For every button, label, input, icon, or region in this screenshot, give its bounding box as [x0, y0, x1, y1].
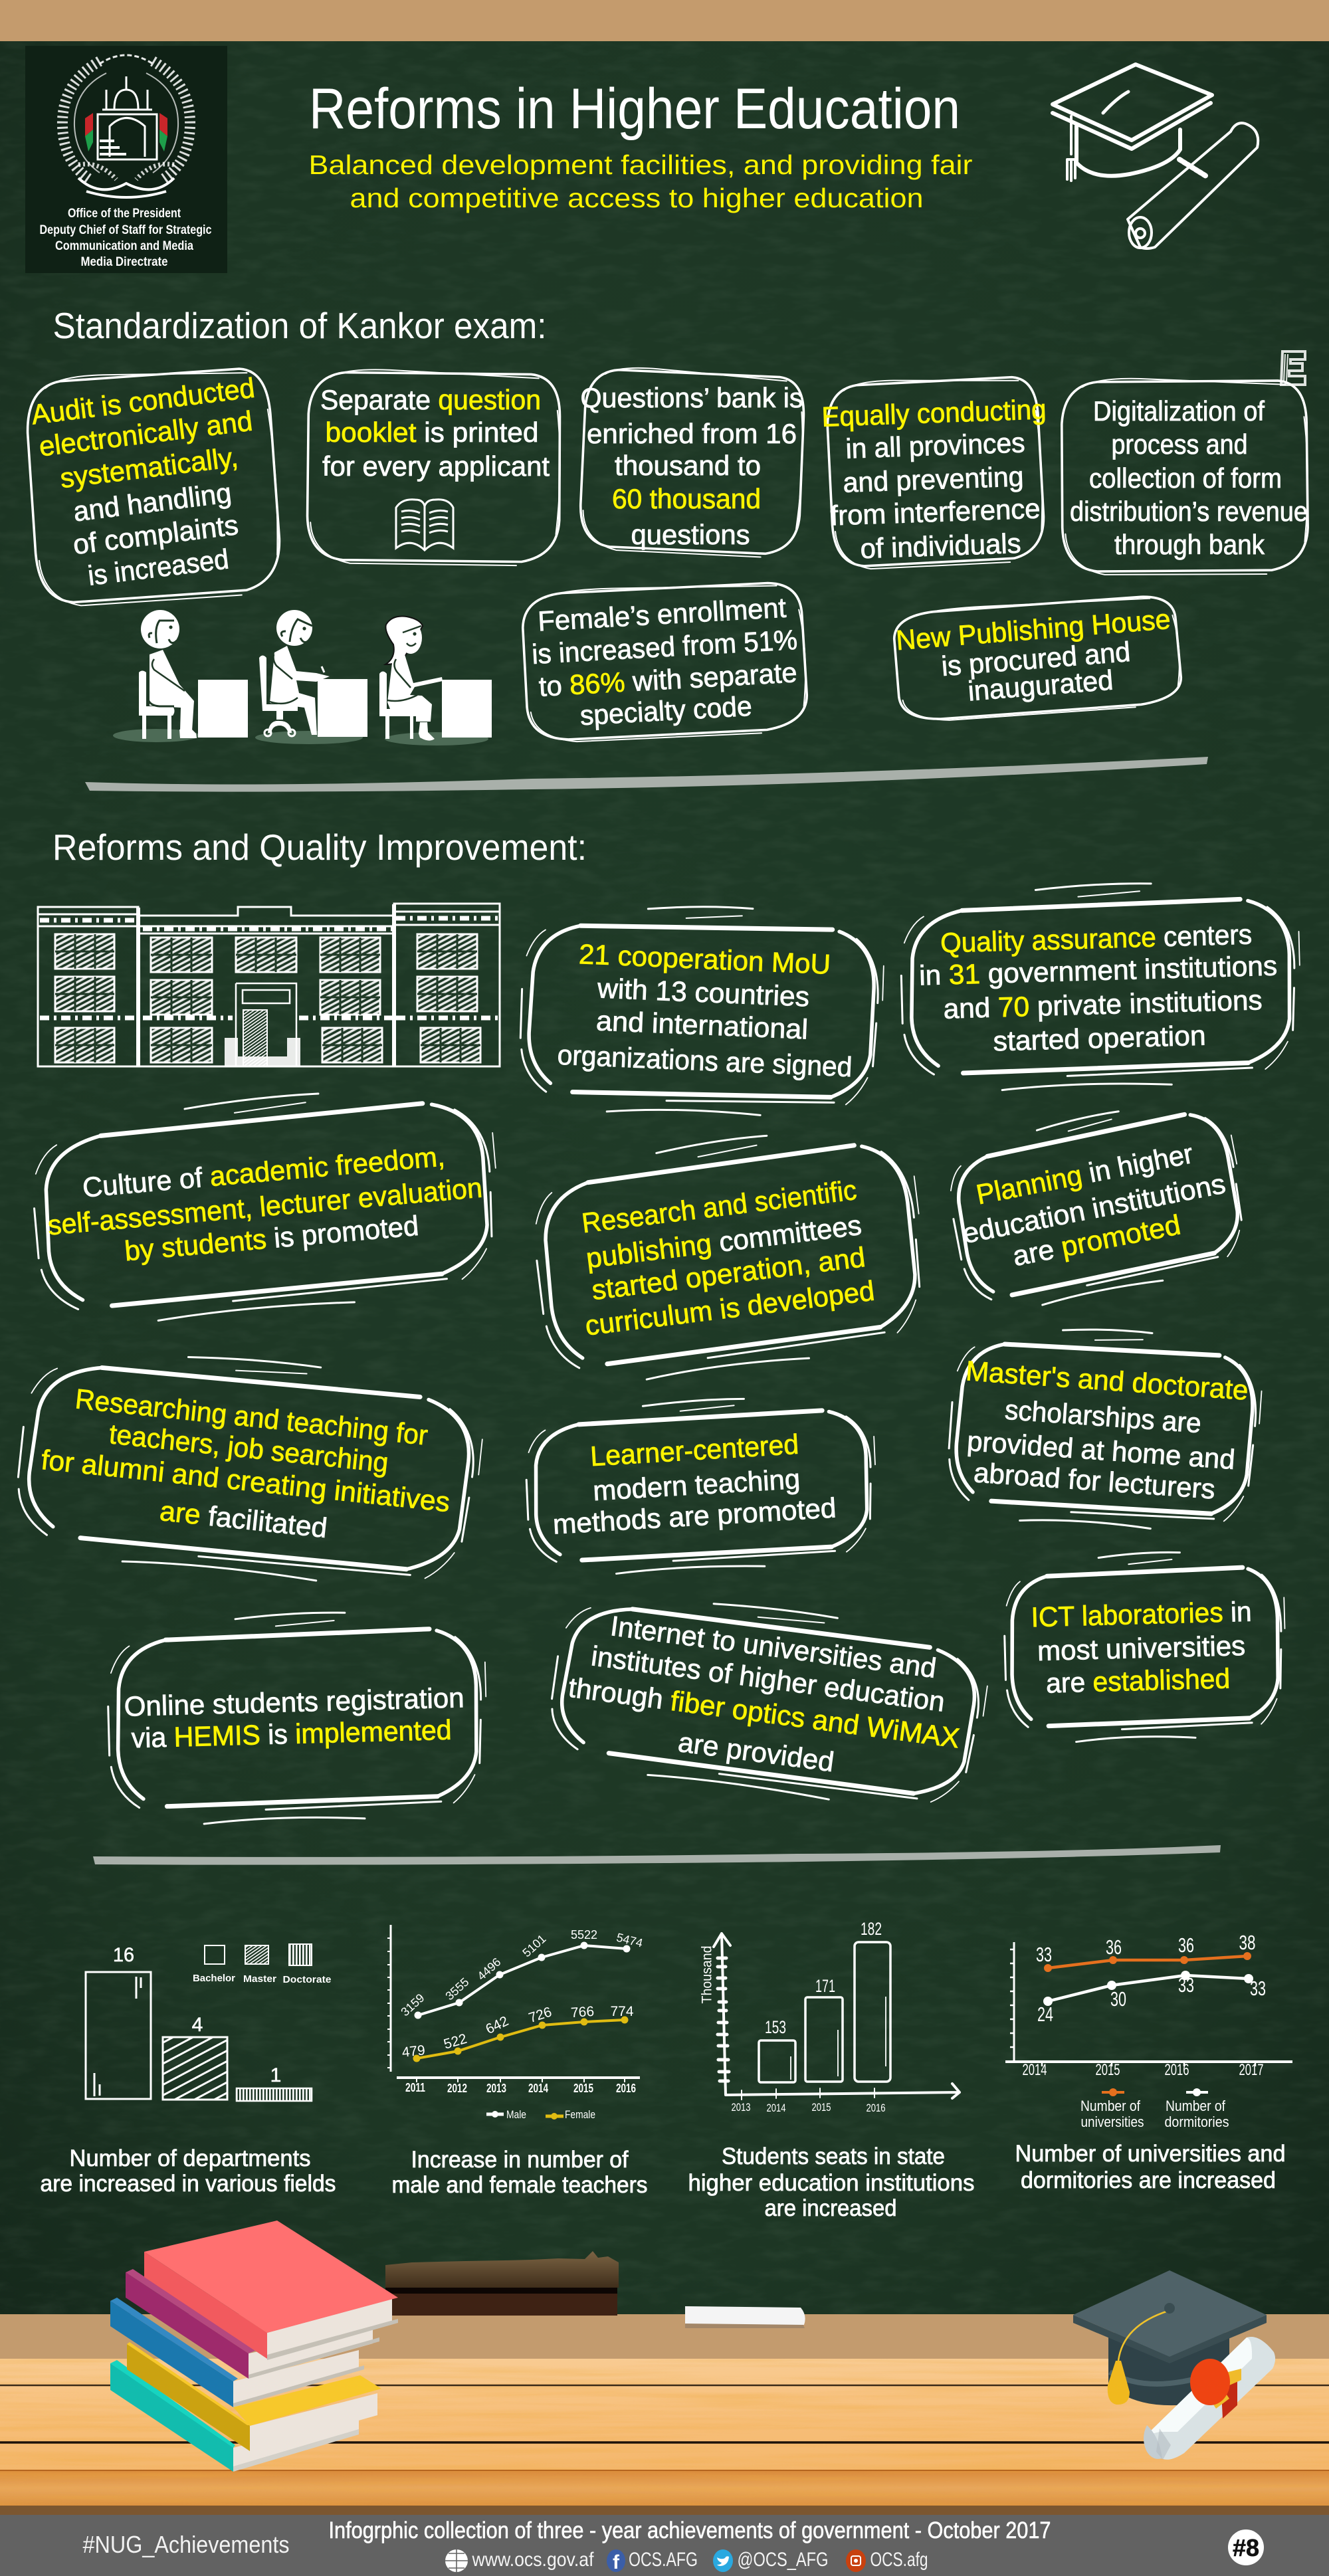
- scholarships text: [965, 1355, 1249, 1505]
- equal conduct text: from interference: [830, 493, 1041, 532]
- legend labels: Master: [243, 1973, 276, 1985]
- value labels: 33: [1178, 1973, 1194, 1997]
- axis title: Thousand: [699, 1945, 715, 2004]
- value labels: 36: [1178, 1933, 1194, 1957]
- panel: scholarships box: [944, 1319, 1265, 1537]
- instagram text: OCS.afg: [870, 2549, 928, 2571]
- blue book: [110, 2298, 364, 2407]
- question bank text: [581, 382, 803, 550]
- equal conduct text: in all provinces: [845, 427, 1025, 464]
- female values: 479: [401, 2042, 426, 2060]
- cap board: [1073, 2315, 1267, 2363]
- caption: Increase in number of: [411, 2147, 629, 2173]
- chart: departments bars: [40, 1944, 336, 2197]
- subtitle: [308, 149, 973, 213]
- x axis years: 2012: [447, 2082, 467, 2095]
- HEMIS text: Online students registration: [124, 1682, 464, 1722]
- digitalization text: process and: [1111, 429, 1248, 460]
- scholarships text: abroad for lecturers: [973, 1456, 1216, 1505]
- audit text: Audit is conducted: [30, 372, 256, 431]
- icon: open book: [396, 500, 453, 550]
- panel: learner-centered box: [523, 1393, 879, 1577]
- panel: MoU box: [518, 901, 885, 1120]
- researching text: for alumni and creating initiatives: [40, 1444, 451, 1518]
- bars: [759, 1942, 890, 2082]
- chalk ledge: [0, 2314, 1329, 2359]
- legend: dormitories: [1164, 2114, 1229, 2130]
- chalk stick: [685, 2306, 805, 2328]
- universities series: [1044, 1952, 1251, 1972]
- academic freedom text: by students is promoted: [124, 1210, 420, 1266]
- panel: HEMIS registration box: [106, 1609, 489, 1827]
- floor shadows: [113, 729, 488, 745]
- axes: [1005, 1942, 1292, 2066]
- axes: [387, 1925, 640, 2082]
- x axis years: 2015: [573, 2082, 593, 2095]
- male values: 4496: [474, 1955, 504, 1983]
- learner text: modern teaching: [592, 1463, 801, 1506]
- bar values: 16: [113, 1944, 134, 1966]
- panel: female enrollment box: [521, 580, 809, 743]
- eraser: [385, 2251, 619, 2316]
- quality assurance text: in 31 government institutions: [919, 949, 1278, 991]
- caption: [392, 2147, 647, 2198]
- booklet text: Separate question: [320, 384, 541, 415]
- illustration: stack of books: [110, 2221, 398, 2472]
- planning text: education institutions: [960, 1167, 1228, 1249]
- x axis years: [1022, 2061, 1264, 2079]
- teal book: [110, 2360, 359, 2472]
- bar: doctorate 1: [237, 2088, 312, 2101]
- panel: internet box: [544, 1580, 994, 1820]
- booklet text: booklet is printed: [326, 417, 538, 448]
- footer title: Infogrphic collection of three - year achievements of government - October 2017: [328, 2518, 1051, 2543]
- male values: [398, 1928, 644, 2019]
- student 2: [259, 610, 330, 736]
- panel: equal conduct box: [821, 374, 1047, 571]
- x axis years: 2016: [1164, 2061, 1189, 2079]
- panel: publishing house box: [892, 593, 1183, 724]
- subtitle: and competitive access to higher education: [350, 183, 924, 213]
- quality assurance text: [919, 918, 1278, 1056]
- scholarships text: provided at home and: [966, 1425, 1236, 1475]
- caption: Number of universities and: [1015, 2141, 1285, 2167]
- caption: Number of departments: [69, 2145, 311, 2171]
- panel: digitalization box: [1062, 379, 1308, 575]
- MoU text: 21 cooperation MoU: [578, 938, 831, 980]
- planning text: Planning in higher: [973, 1138, 1195, 1210]
- tassel: [1108, 2303, 1175, 2405]
- legend: Number of: [1166, 2098, 1226, 2114]
- booklet text: for every applicant: [322, 450, 550, 482]
- question bank text: questions: [631, 519, 750, 550]
- female values: 522: [442, 2031, 468, 2052]
- value labels: 33: [1250, 1977, 1266, 2000]
- desk 3: [442, 680, 492, 738]
- MoU text: and international: [595, 1005, 809, 1045]
- female values: 766: [570, 2004, 595, 2021]
- caption: [40, 2145, 336, 2197]
- ICT text: most universities: [1037, 1630, 1246, 1666]
- desk 2: [318, 679, 367, 737]
- twitter text: @OCS_AFG: [738, 2549, 828, 2571]
- male series: [415, 1941, 630, 2019]
- caption: [688, 2143, 974, 2221]
- researching text: Researching and teaching for: [74, 1383, 429, 1451]
- publishing house text: [895, 603, 1172, 707]
- x axis years: [405, 2081, 636, 2095]
- illustration: students at desks: [113, 610, 492, 745]
- HEMIS text: via HEMIS is implemented: [131, 1714, 452, 1753]
- value labels: 38: [1239, 1931, 1256, 1954]
- female enrollment text: [531, 592, 798, 731]
- MoU text: organizations are signed: [557, 1039, 853, 1082]
- panel: research committees box: [525, 1118, 935, 1391]
- male values: 3555: [443, 1975, 472, 2003]
- academic freedom text: [47, 1140, 484, 1266]
- digitalization text: through bank: [1114, 529, 1265, 560]
- axes with arrows: [714, 1933, 960, 2100]
- panel: question booklet box: [306, 369, 562, 567]
- x axis years: 2014: [767, 2102, 785, 2114]
- subtitle: Balanced development facilities, and providing fair: [308, 149, 973, 180]
- panel: researching and teaching box: [11, 1337, 488, 1597]
- value labels: 36: [1106, 1935, 1122, 1959]
- digitalization text: [1070, 395, 1308, 560]
- MoU text: [557, 938, 853, 1082]
- researching text: are facilitated: [158, 1495, 329, 1543]
- coral book: [144, 2221, 398, 2360]
- panel: ICT laboratories box: [1003, 1549, 1288, 1743]
- audit text: and handling: [72, 477, 233, 527]
- icon: instagram: [846, 2549, 866, 2572]
- male values: 5101: [520, 1932, 549, 1959]
- x axis years: 2016: [867, 2102, 885, 2114]
- research committees text: curriculum is developed: [583, 1275, 876, 1341]
- panel: planning box: [939, 1090, 1256, 1318]
- x axis years: 2014: [1022, 2061, 1047, 2079]
- female values: 774: [610, 2004, 634, 2019]
- page number badge: #8: [1233, 2534, 1259, 2561]
- digitalization text: distribution’s revenue: [1070, 496, 1308, 527]
- icon: twitter: [713, 2549, 733, 2572]
- equal conduct text: [821, 393, 1047, 564]
- male values: 5522: [571, 1928, 597, 1941]
- panel: academic freedom box: [27, 1078, 506, 1330]
- heading: Standardization of Kankor exam: Standardization of Kankor exam:: [53, 305, 546, 346]
- scholarships text: Master's and doctorate: [965, 1355, 1249, 1406]
- panel: question bank box: [577, 365, 807, 559]
- legend: universities: [1080, 2114, 1144, 2130]
- bar: bachelor 16: [86, 1972, 151, 2099]
- ICT text: are established: [1046, 1662, 1231, 1699]
- heading: Reforms and Quality Improvement: Reforms and Quality Improvement:: [52, 827, 587, 868]
- publishing house text: inaugurated: [967, 664, 1114, 707]
- organisation text: [40, 207, 212, 269]
- chart: universities and dormitories line chart: [1005, 1931, 1292, 2193]
- researching text: [40, 1383, 451, 1543]
- learner text: Learner-centered: [589, 1429, 799, 1472]
- legend: Female: [565, 2108, 595, 2121]
- x axis years: 2016: [616, 2082, 636, 2095]
- equal conduct text: and preventing: [843, 460, 1024, 498]
- panel: quality assurance box: [899, 879, 1302, 1092]
- question bank text: thousand to: [615, 450, 761, 481]
- page number badge: [1228, 2529, 1264, 2565]
- illustration: school building: [38, 904, 500, 1066]
- yellow book: [127, 2342, 381, 2451]
- bar: master 4: [163, 2037, 227, 2100]
- planning text: [960, 1138, 1228, 1272]
- legend: Male: [506, 2108, 526, 2121]
- digitalization text: Digitalization of: [1093, 395, 1265, 427]
- hashtag: #NUG_Achievements: [82, 2531, 290, 2558]
- internet text: institutes of higher education: [589, 1640, 947, 1718]
- audit text: of complaints: [71, 509, 240, 560]
- website text: www.ocs.gov.af: [472, 2549, 594, 2571]
- research committees text: started operation, and: [590, 1241, 867, 1306]
- illustration: graduation cap and diploma: [1073, 2270, 1275, 2460]
- female values: 726: [527, 2004, 554, 2026]
- bar values: 1: [270, 2064, 281, 2086]
- male values: 5474: [615, 1931, 644, 1950]
- x axis years: 2013: [486, 2082, 506, 2095]
- building windows: [55, 934, 480, 1062]
- research committees text: Research and scientific: [580, 1174, 859, 1238]
- legend icons: [205, 1944, 312, 1965]
- equal conduct text: Equally conducting: [821, 393, 1047, 433]
- value labels: 30: [1110, 1987, 1126, 2011]
- audit text: is increased: [86, 543, 231, 591]
- female values: [401, 2004, 634, 2060]
- x axis years: 2014: [528, 2082, 548, 2095]
- MoU text: with 13 countries: [596, 972, 810, 1013]
- female enrollment text: Female’s enrollment: [537, 592, 787, 637]
- caption: are increased: [764, 2195, 897, 2221]
- organisation text: Office of the President: [68, 207, 181, 221]
- audit text: electronically and: [37, 405, 254, 462]
- panel: audit box: [25, 365, 282, 608]
- legend: Number of: [1080, 2098, 1141, 2114]
- x axis years: 2013: [731, 2101, 751, 2114]
- female enrollment text: to 86% with separate: [538, 656, 798, 702]
- audit text: systematically,: [58, 441, 240, 494]
- legend: [1080, 2088, 1229, 2130]
- legend labels: [193, 1973, 331, 1985]
- wall band at top: [0, 0, 1329, 41]
- title: Reforms in Higher Education: [309, 77, 960, 141]
- internet text: are provided: [676, 1726, 836, 1777]
- bar values: 153: [765, 2017, 786, 2037]
- icon: national emblem: [62, 55, 190, 197]
- caption: [1015, 2141, 1285, 2193]
- icon: facebook: f: [613, 2551, 620, 2573]
- facebook text: OCS.AFG: [629, 2549, 698, 2571]
- x axis years: [731, 2101, 885, 2114]
- desk 1: [198, 680, 248, 738]
- bar values: 182: [861, 1919, 882, 1939]
- equal conduct text: of individuals: [860, 528, 1021, 564]
- cap skull: [1108, 2333, 1229, 2405]
- diploma: [1144, 2337, 1275, 2460]
- icon: chalk letter E: [1281, 351, 1305, 385]
- female enrollment text: specialty code: [579, 690, 753, 731]
- caption: male and female teachers: [392, 2172, 647, 2198]
- bar values: 4: [192, 2014, 203, 2036]
- scholarships text: scholarships are: [1004, 1394, 1202, 1438]
- caption: Students seats in state: [722, 2143, 945, 2169]
- bar values: [765, 1919, 882, 2037]
- publishing house text: is procured and: [940, 636, 1132, 682]
- internet text: Internet to universities and: [609, 1610, 938, 1684]
- publishing house text: New Publishing House: [895, 603, 1172, 656]
- legend: [486, 2108, 595, 2121]
- x axis years: 2017: [1239, 2061, 1264, 2079]
- student 1: [139, 610, 197, 739]
- question bank text: 60 thousand: [612, 483, 761, 514]
- academic freedom text: Culture of academic freedom,: [81, 1140, 446, 1203]
- caption: higher education institutions: [688, 2170, 974, 2196]
- value labels: 33: [1036, 1943, 1052, 1966]
- legend labels: Bachelor: [193, 1973, 235, 1984]
- female series: [413, 2016, 629, 2062]
- student 3: [379, 617, 443, 741]
- icon: website: [445, 2549, 468, 2572]
- chart: teachers line chart: [387, 1925, 647, 2198]
- value labels: [1036, 1931, 1266, 2026]
- x axis years: 2015: [812, 2101, 831, 2114]
- legend labels: Doctorate: [283, 1974, 331, 1985]
- male values: 3159: [398, 1991, 427, 2019]
- female enrollment text: is increased from 51%: [531, 624, 798, 670]
- purple book: [126, 2269, 379, 2379]
- audit text: [30, 372, 256, 591]
- bar values: 171: [815, 1976, 835, 1996]
- organisation text: Communication and Media: [55, 239, 193, 253]
- icon: facebook: [607, 2549, 625, 2573]
- digitalization text: collection of form: [1089, 462, 1282, 494]
- footer bar: [0, 2515, 1329, 2576]
- organisation text: Media Directrate: [81, 255, 167, 269]
- internet text: [567, 1610, 962, 1777]
- planning text: are promoted: [1010, 1209, 1183, 1272]
- organisation text: Deputy Chief of Staff for Strategic: [40, 223, 212, 237]
- wooden table: [0, 2359, 1329, 2515]
- academic freedom text: self-assessment, lecturer evaluation: [47, 1172, 484, 1241]
- quality assurance text: started operation: [993, 1020, 1206, 1056]
- question bank text: Questions’ bank is: [581, 382, 803, 413]
- caption: are increased in various fields: [40, 2171, 336, 2197]
- internet text: through fiber optics and WiMAX: [567, 1672, 962, 1754]
- ICT text: [1031, 1596, 1252, 1699]
- bar values: [113, 1944, 281, 2086]
- researching text: teachers, job searching: [108, 1418, 390, 1478]
- x axis years: 2011: [405, 2081, 425, 2094]
- booklet text: [320, 384, 550, 482]
- female values: 642: [483, 2013, 511, 2037]
- icon: graduation cap and scroll line art: [1053, 64, 1258, 248]
- quality assurance text: Quality assurance centers: [940, 918, 1253, 959]
- question bank text: enriched from 16: [587, 418, 797, 449]
- x axis years: 2015: [1095, 2061, 1120, 2079]
- panel: logo block: [25, 46, 227, 273]
- learner text: [552, 1429, 837, 1540]
- dormitories series: [1043, 1971, 1253, 2006]
- research committees text: [580, 1174, 876, 1341]
- caption: dormitories are increased: [1021, 2167, 1276, 2193]
- ICT text: ICT laboratories in: [1031, 1596, 1252, 1633]
- research committees text: publishing committees: [584, 1209, 863, 1274]
- quality assurance text: and 70 private institutions: [943, 984, 1263, 1025]
- value labels: 24: [1037, 2003, 1053, 2026]
- chart: student seats bars: [688, 1919, 974, 2221]
- learner text: methods are promoted: [552, 1492, 837, 1540]
- HEMIS text: [124, 1682, 464, 1753]
- window mullions: [55, 934, 480, 1062]
